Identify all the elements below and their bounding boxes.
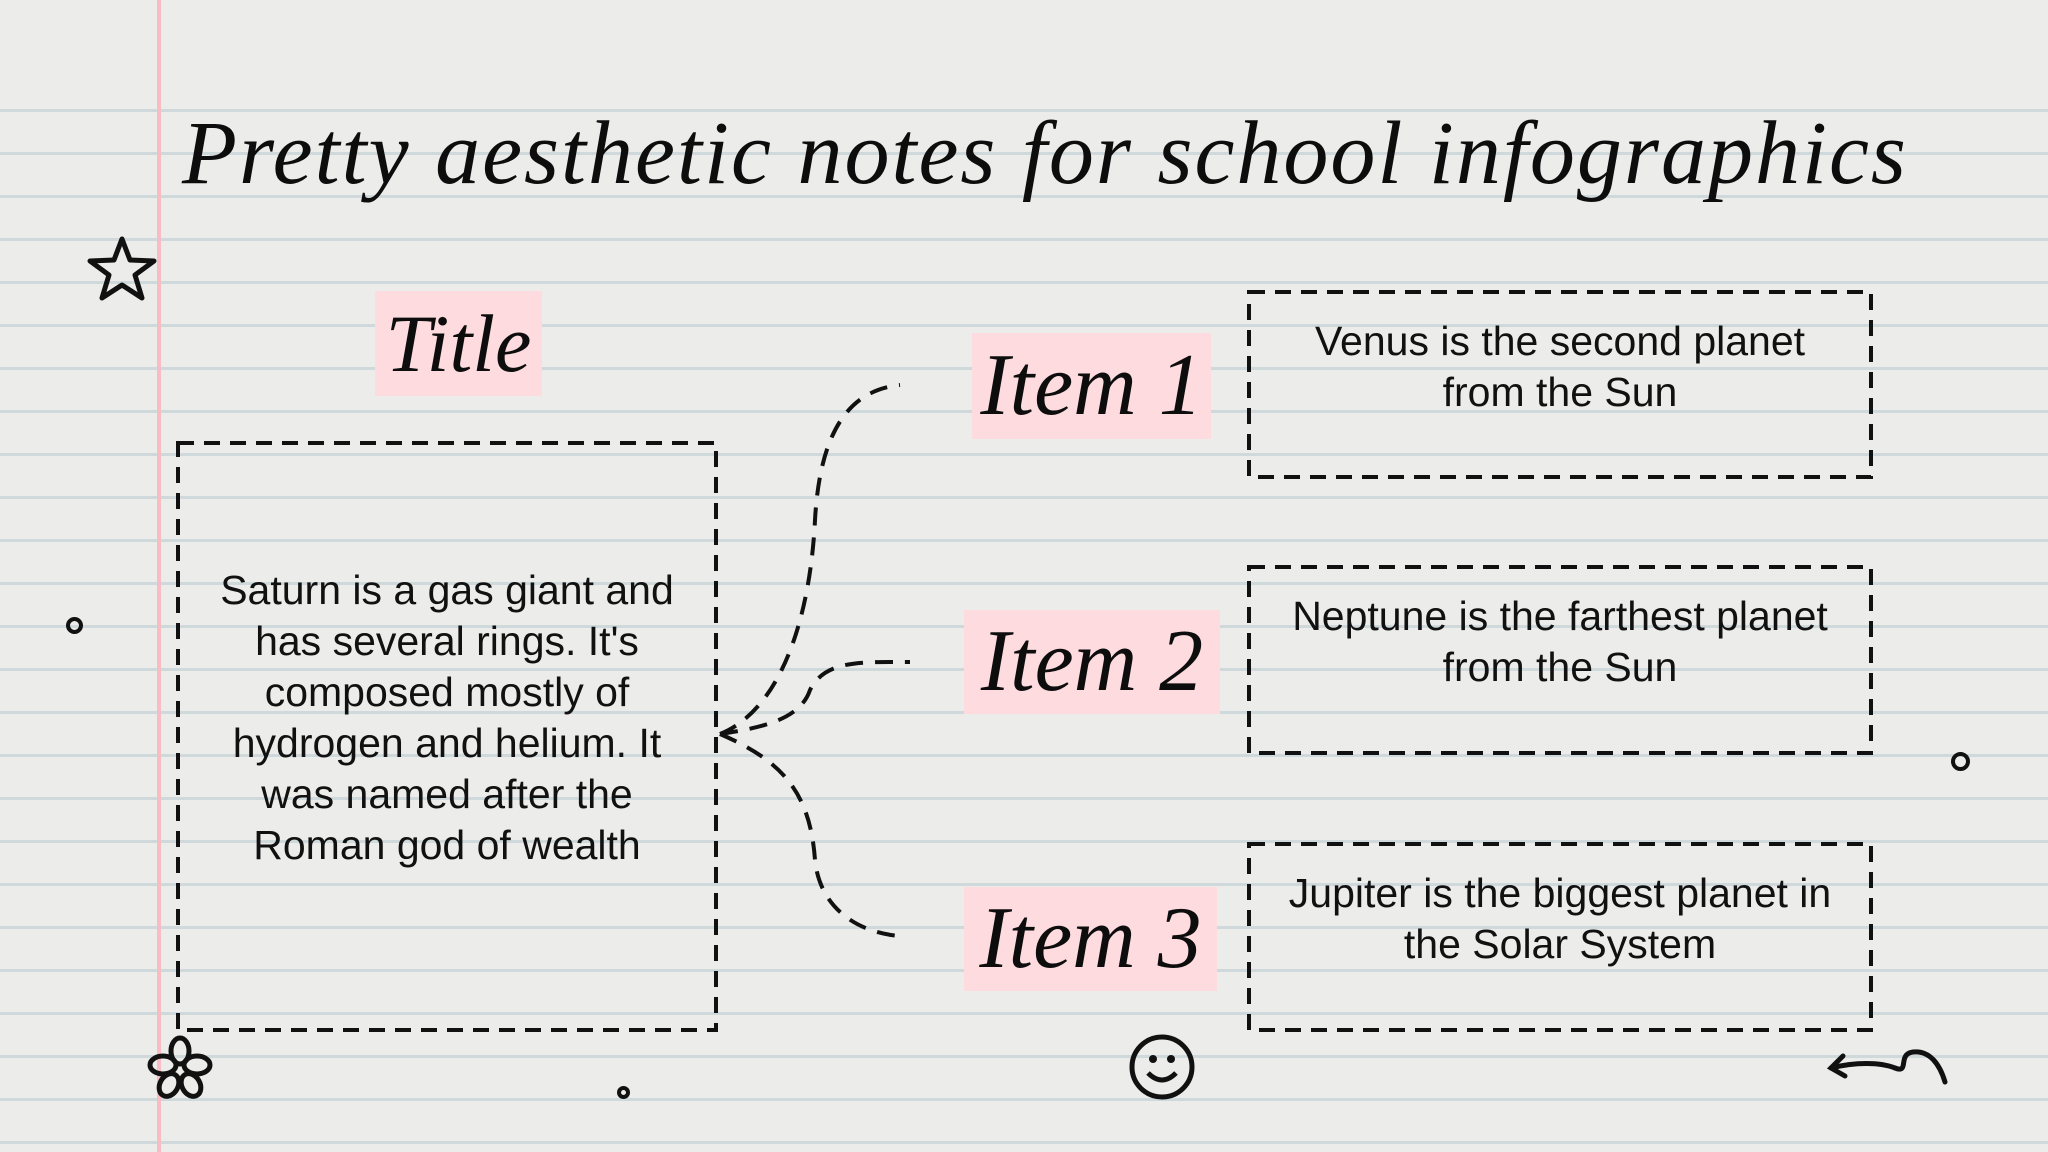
panel: item 3 text: Jupiter is the biggest planet in [1289, 870, 1831, 916]
panel: item 2 text [1247, 565, 1873, 755]
icon: curly arrow [1827, 1049, 1948, 1084]
panel: item 1 text: Venus is the second planet [1315, 318, 1805, 364]
panel: item 1 text [1247, 290, 1873, 479]
panel: Saturn text box [176, 441, 718, 1032]
icon: small circle right [1951, 752, 1970, 771]
panel: item 1 text: from the Sun [1443, 369, 1677, 415]
panel: item 2 text: from the Sun [1443, 644, 1677, 690]
icon: flower [148, 1036, 212, 1099]
panel: item 3 text: the Solar System [1404, 921, 1716, 967]
panel: item 3 text [1247, 842, 1873, 1032]
icon: star [88, 236, 156, 300]
icon: small circle left [66, 617, 83, 634]
label: Item 2: Item 2 [981, 613, 1203, 710]
icon: dot [617, 1086, 630, 1099]
title: Pretty aesthetic notes for school infographics [182, 104, 1908, 203]
connectors [719, 383, 910, 938]
margin line [157, 0, 161, 1152]
icon: smiley [1130, 1034, 1194, 1100]
panel: item 2 text: Neptune is the farthest planet [1292, 593, 1828, 639]
label: Item 1: Item 1 [980, 337, 1203, 434]
heading: Title: Title [386, 298, 531, 389]
label: Item 3: Item 3 [979, 890, 1202, 987]
text: Saturn description: Saturn is a gas giant and has several rings. It's composed mostly of hydrogen and helium. It was named after the Roman god of wealth [220, 567, 674, 868]
